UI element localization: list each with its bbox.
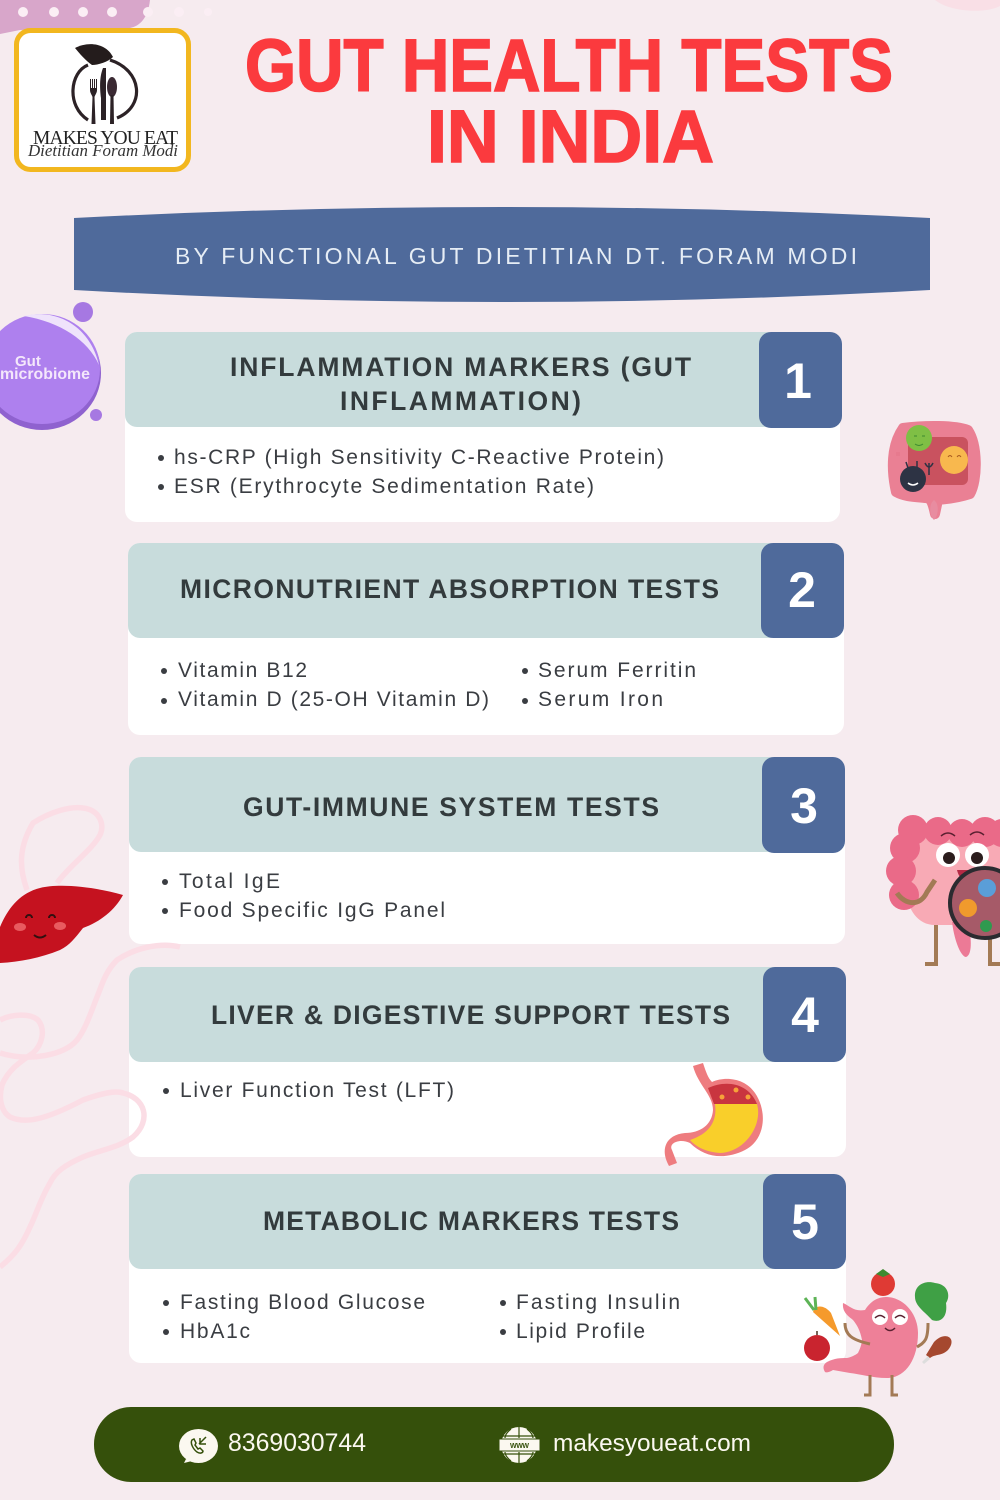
number badge 3: 3 — [790, 778, 818, 834]
test list 1: ESR (Erythrocyte Sedimentation Rate) — [174, 475, 594, 498]
icon: website globe — [499, 1427, 540, 1463]
number badge 1: 1 — [784, 353, 812, 409]
test list 3 — [162, 870, 445, 922]
heading: inflammation markers: INFLAMMATION MARKERS (GUT — [230, 352, 691, 382]
sticker: gut microbiome: Gut — [15, 353, 41, 370]
icon: stomach character with foods — [804, 1269, 952, 1395]
test list 2: Vitamin D (25-OH Vitamin D) — [178, 688, 489, 711]
test list 2 — [161, 659, 696, 711]
test list 1 — [158, 446, 664, 498]
icon: intestine character with magnifier — [886, 815, 1000, 964]
banner: author: BY FUNCTIONAL GUT DIETITIAN DT. FORAM MODI — [175, 243, 857, 269]
number badge 5: 5 — [791, 1194, 819, 1250]
phone number: 8369030744 — [228, 1429, 366, 1457]
heading: liver and digestive support tests: LIVER & DIGESTIVE SUPPORT TESTS — [211, 1000, 730, 1030]
banner: author — [74, 207, 930, 302]
test list 2: Serum Ferritin — [538, 659, 696, 682]
test list 2: Serum Iron — [538, 688, 663, 711]
test list 3: Total IgE — [179, 870, 280, 893]
sticker: gut microbiome: microbiome — [0, 366, 90, 383]
title: IN INDIA — [427, 95, 714, 178]
panel: gut-immune system — [129, 757, 845, 944]
test list 5: Fasting Blood Glucose — [180, 1291, 425, 1314]
test list 5 — [163, 1291, 680, 1343]
test list 4: Liver Function Test (LFT) — [180, 1079, 454, 1102]
panel: metabolic markers — [129, 1174, 846, 1363]
heading: micronutrient absorption tests: MICRONUTRIENT ABSORPTION TESTS — [180, 574, 719, 604]
test list 2: Vitamin B12 — [178, 659, 307, 682]
heading: metabolic markers tests: METABOLIC MARKERS TESTS — [263, 1206, 679, 1236]
panel: micronutrient absorption — [128, 543, 844, 735]
test list 5: HbA1c — [180, 1320, 250, 1343]
number badge 5 — [763, 1174, 846, 1269]
logo — [16, 30, 188, 170]
number badge 2: 2 — [788, 562, 816, 618]
logo: Dietitian Foram Modi — [27, 141, 178, 160]
icon: happy liver — [0, 886, 123, 963]
number badge 4 — [763, 967, 846, 1062]
test list 1: hs-CRP (High Sensitivity C-Reactive Protein) — [174, 446, 664, 469]
icon: intestine with bacteria — [893, 425, 976, 520]
test list 5: Fasting Insulin — [516, 1291, 680, 1314]
heading: inflammation markers: INFLAMMATION) — [340, 386, 581, 416]
title — [245, 24, 893, 178]
logo: MAKES YOU EAT — [33, 128, 178, 149]
heading: gut-immune system tests: GUT-IMMUNE SYSTEM TESTS — [243, 792, 659, 822]
icon: phone — [179, 1429, 218, 1463]
sticker: gut microbiome — [0, 302, 102, 430]
title: GUT HEALTH TESTS — [245, 24, 893, 107]
website address: makesyoueat.com — [553, 1430, 751, 1457]
test list 3: Food Specific IgG Panel — [179, 899, 445, 922]
footer contact bar — [94, 1407, 894, 1482]
number badge 2 — [761, 543, 844, 638]
test list 5: Lipid Profile — [516, 1320, 645, 1343]
number badge 1 — [759, 332, 842, 428]
panel: inflammation markers — [125, 332, 842, 522]
icon: website globe: WWW — [510, 1443, 529, 1450]
number badge 4: 4 — [791, 987, 819, 1043]
heading: inflammation markers — [230, 352, 691, 416]
icon: stomach — [665, 1063, 763, 1166]
number badge 3 — [762, 757, 845, 853]
panel: liver and digestive support — [129, 967, 846, 1157]
